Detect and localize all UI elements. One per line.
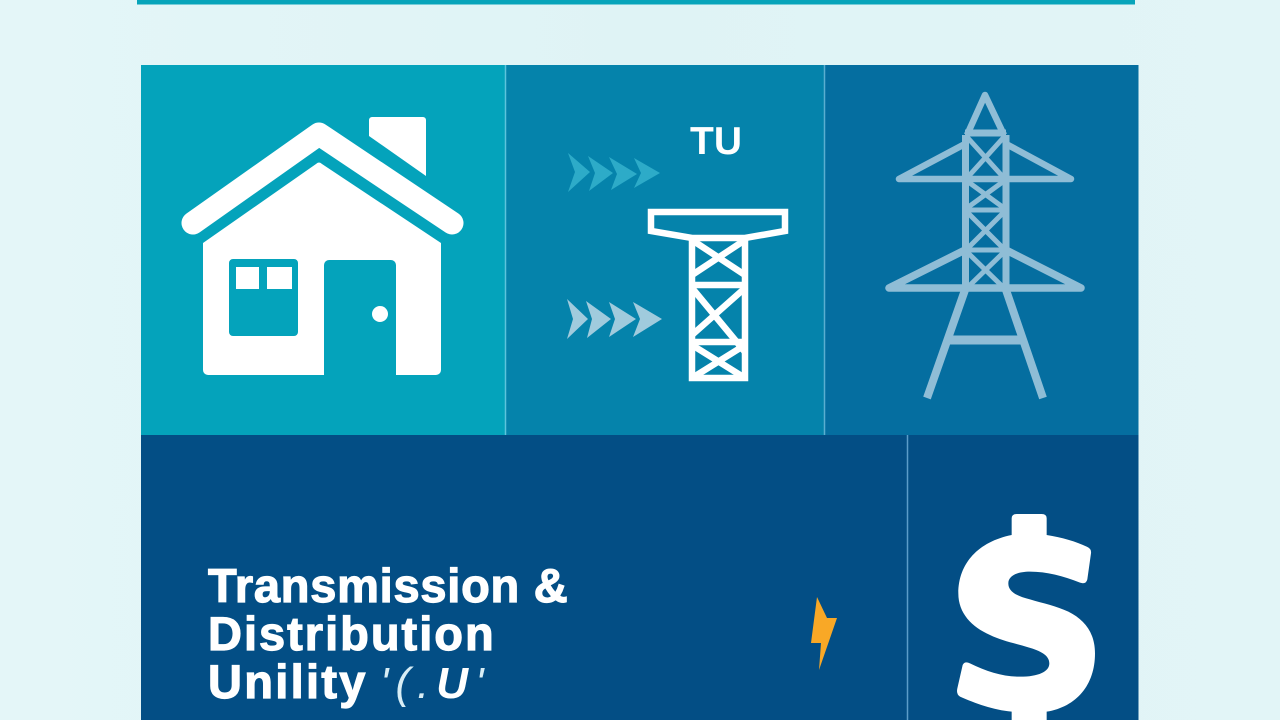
pylon peak [967,95,1004,135]
tower head [651,212,785,238]
top accent bar [137,0,1135,4]
title: Transmission & Distribution Utility: Unility [208,655,368,708]
arrows: lower chevrons [567,299,662,339]
panel dividers [506,65,908,720]
icon: T-shaped tower [651,212,785,378]
house chimney [369,117,426,176]
icon: house [193,117,452,375]
icon: lightning bolt [811,597,837,670]
panel: transmission pylon [825,65,1138,435]
house roof [193,134,452,223]
panel: house [141,65,505,435]
house window panes [236,267,292,289]
house door knob [372,306,388,322]
pylon leg crossbar [949,336,1022,344]
pylon legs [927,290,1043,398]
title: Transmission & Distribution Utility: Distribution [208,607,496,660]
house body [203,162,441,375]
icon: transmission pylon [889,95,1081,398]
garbled suffix: '(.U' [380,659,490,708]
pylon upper arms [899,145,1071,179]
tower column [692,238,745,378]
tower bracing [692,240,745,378]
panel: utility title and cost [141,435,1138,720]
icon: dollar sign [957,514,1095,720]
title: Transmission & Distribution Utility: Transmission & [208,559,568,612]
panel: lattice tower with arrows [505,65,825,435]
pylon lower arms [889,251,1081,288]
label: TU: TU [690,120,742,163]
arrows: upper chevrons [568,153,660,192]
pylon body [965,133,1006,290]
pylon cross-bracing [965,137,1006,288]
